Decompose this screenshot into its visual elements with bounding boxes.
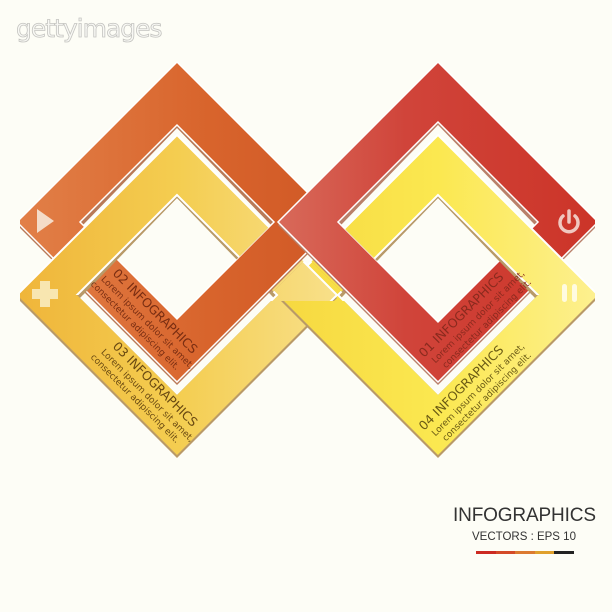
text: 01 INFOGRAPHICS: Lorem ipsum dolor sit amet, [430, 269, 527, 366]
weave overlay right [308, 134, 595, 301]
ring 02 orange [20, 62, 308, 385]
ring 03 yellow-orange [20, 198, 308, 458]
icon: power [560, 211, 578, 232]
text: 01 INFOGRAPHICS: 01 INFOGRAPHICS [416, 269, 507, 360]
ring 04 yellow [281, 198, 595, 458]
text: 03 INFOGRAPHICS: Lorem ipsum dolor sit amet, [99, 348, 195, 444]
text: 04 INFOGRAPHICS: consectetur adipiscing elit. [441, 351, 534, 444]
diagram: interlocking rings [17, 62, 598, 458]
text: 02 INFOGRAPHICS: 02 INFOGRAPHICS [110, 266, 201, 357]
text: 02 INFOGRAPHICS: consectetur adipiscing elit. [88, 280, 181, 373]
weave overlay left [20, 134, 338, 301]
icon: plus [32, 281, 58, 307]
text: 03 INFOGRAPHICS: consectetur adipiscing elit. [88, 353, 181, 446]
text: 02 INFOGRAPHICS [88, 260, 207, 379]
text: 01 INFOGRAPHICS [416, 257, 535, 376]
text: 04 INFOGRAPHICS: 04 INFOGRAPHICS [416, 342, 507, 433]
text: 03 INFOGRAPHICS: 03 INFOGRAPHICS [110, 339, 201, 430]
ring 01 red [278, 62, 598, 385]
icon: pause [562, 284, 577, 302]
logo: gettyimages: gettyimages [16, 14, 162, 43]
text: 04 INFOGRAPHICS: Lorem ipsum dolor sit amet, [430, 342, 527, 439]
text: 03 INFOGRAPHICS [88, 333, 207, 452]
caption: INFOGRAPHICS: INFOGRAPHICS [453, 505, 596, 526]
colour bar [476, 551, 574, 554]
text: 02 INFOGRAPHICS: Lorem ipsum dolor sit amet, [99, 275, 195, 371]
caption: VECTORS : EPS 10: VECTORS : EPS 10 [472, 531, 576, 543]
icon: play [37, 209, 54, 233]
text: 01 INFOGRAPHICS: consectetur adipiscing elit. [441, 278, 534, 371]
text: 04 INFOGRAPHICS [416, 330, 535, 449]
